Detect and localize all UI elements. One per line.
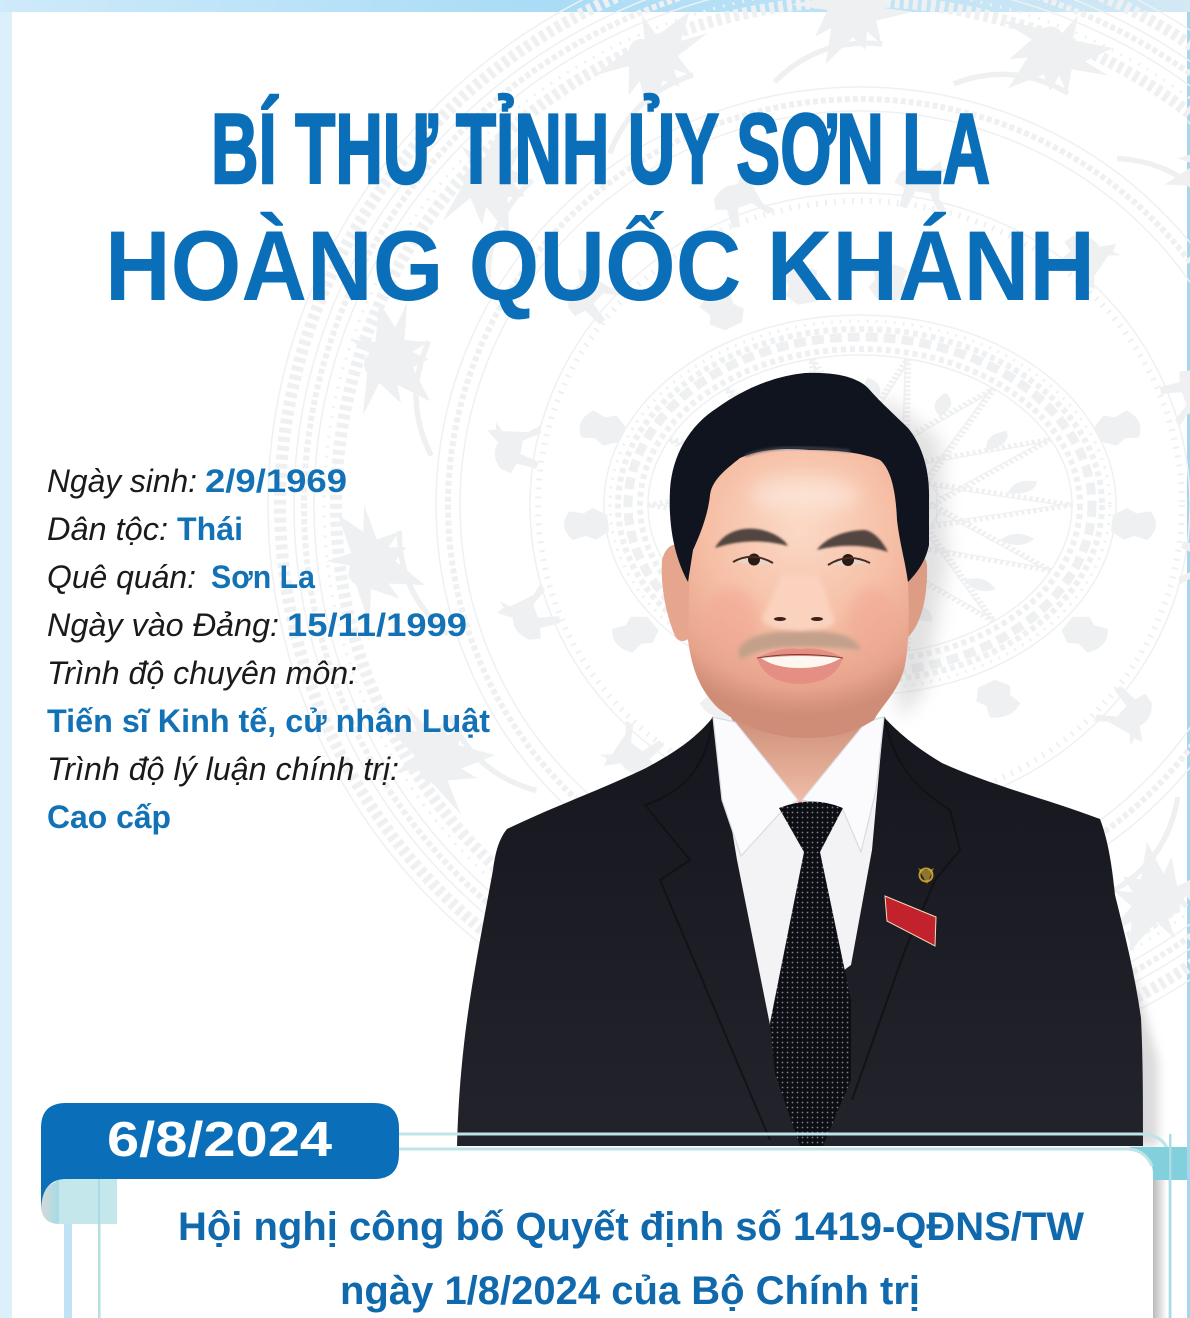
frame: left strip xyxy=(0,12,12,1318)
date banner xyxy=(41,1103,399,1212)
decision text xyxy=(178,1205,1084,1313)
title line 2: HOÀNG QUỐC KHÁNH xyxy=(105,210,1095,321)
left ear xyxy=(662,545,692,641)
right eyebrow xyxy=(817,530,888,552)
party pin xyxy=(918,868,934,884)
ethnicity xyxy=(47,511,243,547)
portrait drop shadow xyxy=(880,395,1158,1146)
collar xyxy=(713,717,884,856)
portrait of Hoàng Quốc Khánh xyxy=(457,373,1143,1146)
left eyebrow xyxy=(715,529,788,548)
ethnicity: Dân tộc: xyxy=(47,511,168,547)
shirt xyxy=(713,717,884,1025)
card shadow xyxy=(1153,1180,1167,1318)
content card xyxy=(100,1149,1153,1318)
political theory label: Trình độ lý luận chính trị: xyxy=(47,751,399,787)
right eye xyxy=(828,554,870,566)
frame: top strip xyxy=(0,0,1190,12)
right vertical line xyxy=(1169,1134,1172,1318)
ethnicity: Thái xyxy=(177,511,243,547)
professional level value: Tiến sĩ Kinh tế, cử nhân Luật xyxy=(47,703,490,739)
hometown: Quê quán: xyxy=(47,559,196,595)
party admission date: Ngày vào Đảng: xyxy=(47,607,279,643)
title xyxy=(105,93,1095,321)
suit xyxy=(457,717,1143,1146)
left eye xyxy=(733,554,773,566)
party admission date xyxy=(47,607,467,643)
mouth xyxy=(757,648,843,684)
hometown xyxy=(47,559,315,595)
connector lines from date banner xyxy=(399,1134,1170,1318)
cheek blush xyxy=(706,588,896,652)
birth date: 2/9/1969 xyxy=(205,463,347,499)
hairline grey strands xyxy=(745,448,850,456)
decision line 2: ngày 1/8/2024 của Bộ Chính trị xyxy=(340,1269,920,1313)
neck xyxy=(722,700,875,805)
forehead highlight xyxy=(750,477,860,513)
party admission date: 15/11/1999 xyxy=(287,607,467,643)
birth date xyxy=(47,463,347,499)
birth date: Ngày sinh: xyxy=(47,463,197,499)
bronze drum background pattern xyxy=(268,0,1190,1077)
right ear xyxy=(905,558,927,640)
hair xyxy=(670,373,929,582)
hometown: Sơn La xyxy=(211,559,315,595)
face xyxy=(688,450,909,738)
nose xyxy=(762,575,835,632)
political theory value: Cao cấp xyxy=(47,799,171,835)
professional level label: Trình độ chuyên môn: xyxy=(47,655,357,691)
biography info block xyxy=(47,463,490,835)
date: 6/8/2024 xyxy=(107,1113,332,1167)
delegate badge xyxy=(885,896,936,946)
left vertical lines xyxy=(64,1224,100,1318)
tie xyxy=(770,802,851,1146)
frame: right strip xyxy=(1187,12,1190,1318)
decision line 1: Hội nghị công bố Quyết định số 1419-QĐNS/TW xyxy=(178,1205,1084,1249)
banner fold xyxy=(41,1179,117,1224)
teal band at right of card xyxy=(1130,1147,1187,1180)
lapels xyxy=(645,717,960,1140)
moustache xyxy=(738,632,861,660)
